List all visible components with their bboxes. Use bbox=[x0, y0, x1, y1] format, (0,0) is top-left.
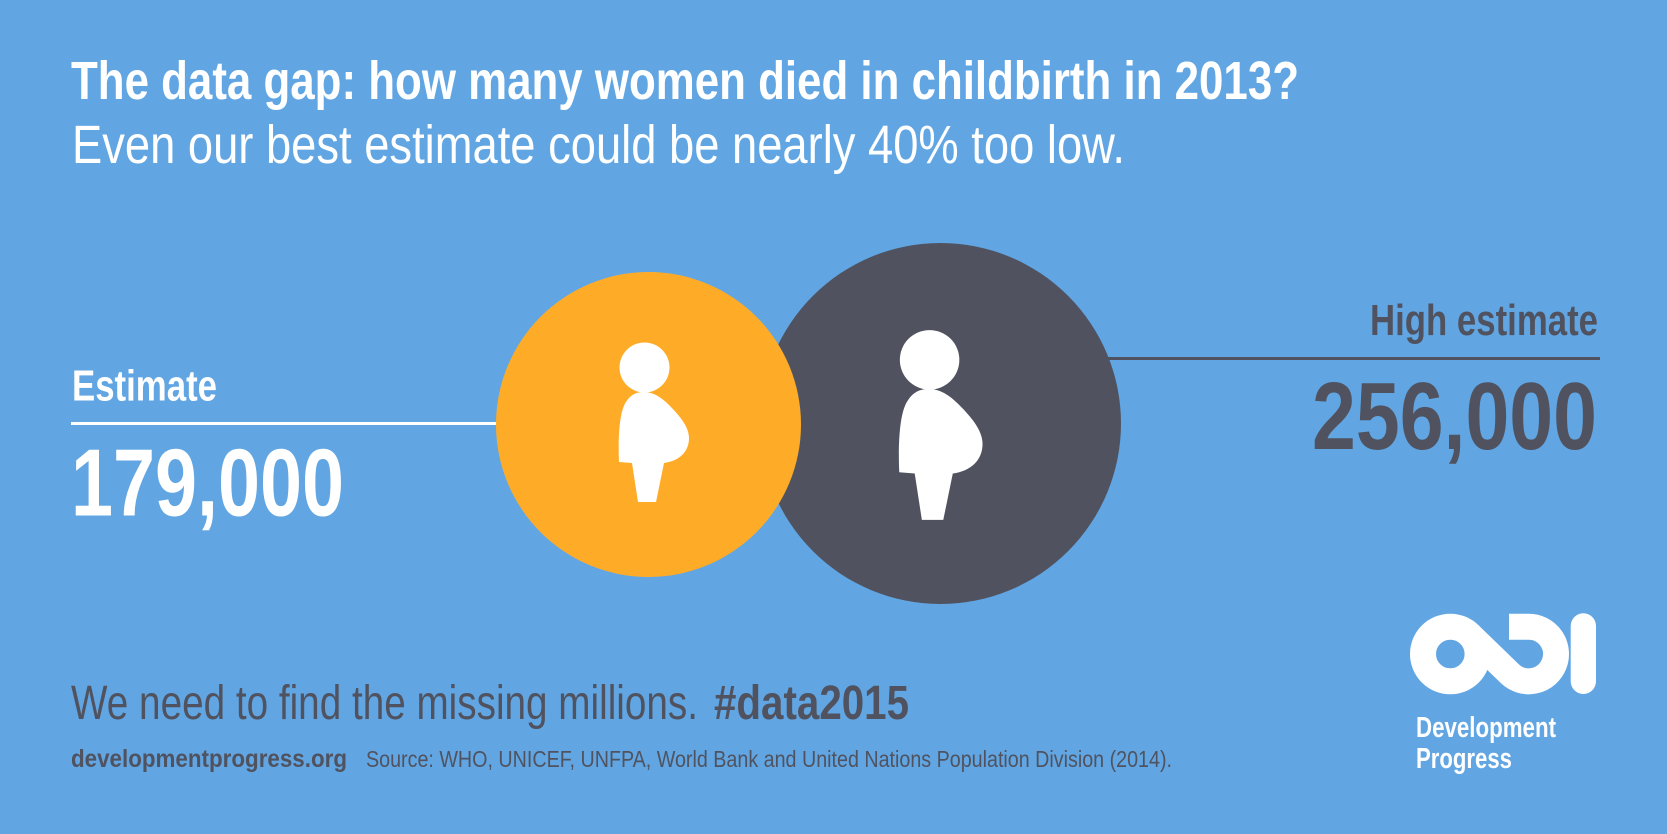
website and source: developmentprogress.org bbox=[71, 745, 347, 773]
website and source: Source: WHO, UNICEF, UNFPA, World Bank and United Nations Population Division (2014). bbox=[366, 746, 1172, 772]
ODI logo: Progress bbox=[1416, 743, 1512, 775]
website and source bbox=[71, 745, 1172, 773]
icon: small pregnant woman bbox=[619, 342, 689, 502]
left estimate: Estimate bbox=[72, 362, 217, 410]
call to action: #data2015 bbox=[714, 677, 909, 730]
high estimate circle bbox=[760, 243, 1121, 604]
right high estimate: 256,000 bbox=[1312, 363, 1597, 470]
right high estimate bbox=[1100, 296, 1600, 470]
icon: large pregnant woman bbox=[899, 330, 983, 520]
title bbox=[71, 51, 1299, 175]
ODI logo: Development bbox=[1416, 712, 1556, 744]
ODI logo bbox=[1416, 613, 1596, 775]
left estimate bbox=[71, 362, 498, 536]
call to action: We need to find the missing millions. bbox=[71, 677, 698, 730]
right high estimate: High estimate bbox=[1370, 296, 1598, 345]
left estimate: 179,000 bbox=[71, 430, 344, 536]
title: The data gap: how many women died in childbirth in 2013? bbox=[71, 51, 1299, 111]
title: Even our best estimate could be nearly 40% too low. bbox=[72, 115, 1125, 175]
estimate circle bbox=[496, 272, 801, 577]
